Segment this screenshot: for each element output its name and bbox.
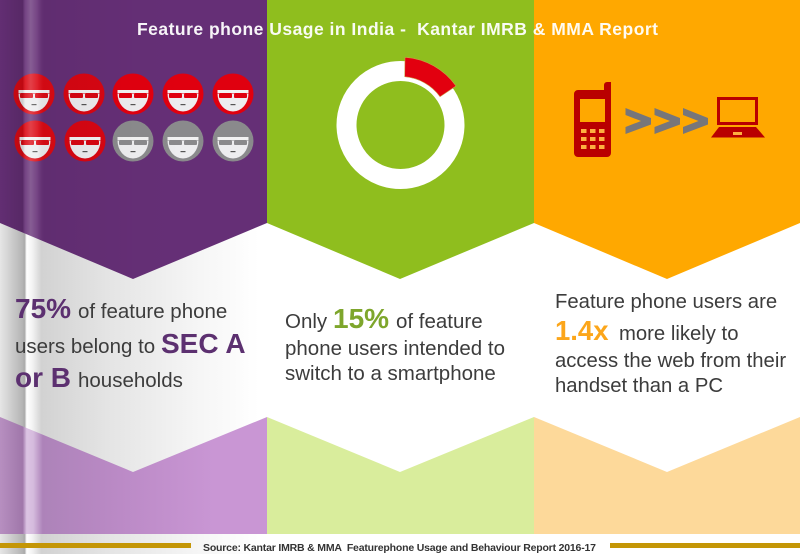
- footer rule left: [0, 543, 191, 548]
- text block: SEC statistic: users belong to: [15, 335, 155, 358]
- panel: purple column header: [0, 0, 267, 279]
- text block: intent to switch statistic: of feature: [396, 310, 483, 333]
- icon: laptop: [711, 98, 765, 138]
- text block: web access statistic: 1.4x: [555, 315, 609, 346]
- text block: intent to switch statistic: switch to a smartphone: [285, 362, 496, 385]
- text block: web access statistic: Feature phone users are: [555, 291, 777, 313]
- text block: web access statistic: [555, 291, 786, 397]
- text block: SEC statistic: SEC A: [161, 328, 246, 359]
- text block: SEC statistic: [15, 293, 246, 393]
- text block: intent to switch statistic: 15%: [333, 303, 389, 334]
- text block: intent to switch statistic: Only: [285, 310, 328, 333]
- icon group: ten people, seven highlighted: [14, 74, 254, 162]
- text block: web access statistic: handset than a PC: [555, 375, 723, 397]
- title: Feature phone Usage in India - Kantar IMRB & MMA Report: [137, 19, 658, 39]
- footer rule right: [610, 543, 800, 548]
- text block: intent to switch statistic: [285, 303, 505, 385]
- text block: SEC statistic: of feature phone: [78, 300, 227, 323]
- text block: web access statistic: access the web from their: [555, 350, 786, 372]
- text block: SEC statistic: 75%: [15, 293, 71, 324]
- chart: donut 15 percent: [346, 57, 456, 179]
- panel: light orange base band: [534, 417, 800, 534]
- panel: green column header: [267, 0, 534, 279]
- arrow: three grey chevrons: [626, 108, 708, 134]
- source note: Source: Kantar IMRB & MMA Featurephone Usage and Behaviour Report 2016-17: [203, 542, 596, 554]
- text block: web access statistic: more likely to: [619, 323, 738, 345]
- text block: SEC statistic: or B: [15, 362, 71, 393]
- panel: orange column header: [534, 0, 800, 279]
- panel: light green base band: [267, 417, 534, 534]
- text block: SEC statistic: households: [78, 369, 183, 392]
- icon: feature phone: [574, 82, 611, 157]
- panel: paper background left: [0, 200, 267, 554]
- panel: lilac base band: [0, 417, 267, 534]
- fold highlight over purple header: [0, 0, 267, 279]
- text block: intent to switch statistic: phone users intended to: [285, 337, 505, 360]
